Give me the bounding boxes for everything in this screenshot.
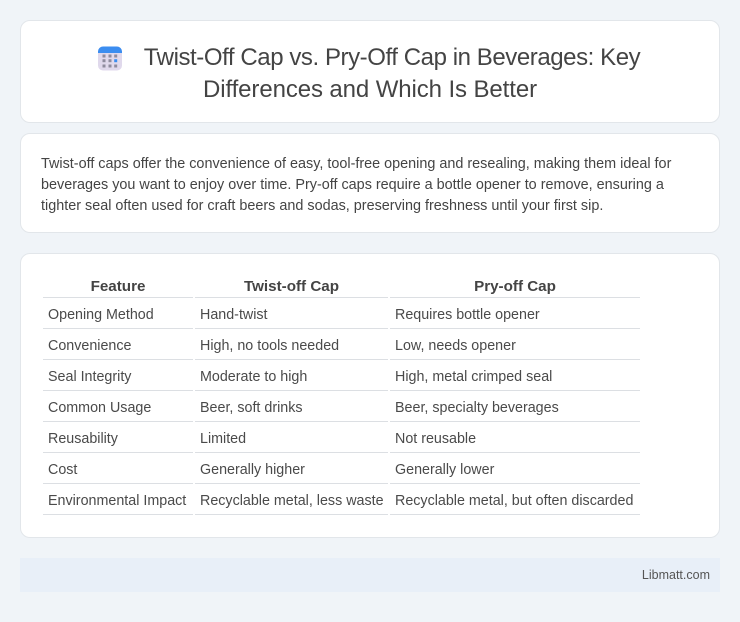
comparison table xyxy=(43,278,640,515)
row: Environmental Impact: Recyclable metal, less waste xyxy=(200,493,384,509)
row: Convenience: High, no tools needed xyxy=(200,338,339,354)
header: Feature: Feature xyxy=(91,278,145,295)
row: Seal Integrity xyxy=(48,369,552,385)
panel: footer bar xyxy=(20,558,720,592)
title xyxy=(144,44,640,103)
header: Twist-off Cap: Twist-off Cap xyxy=(244,278,339,295)
icon: calendar xyxy=(98,46,122,70)
row: Environmental Impact: Environmental Impact xyxy=(48,493,186,509)
row: Convenience: Low, needs opener xyxy=(395,338,516,354)
row: Cost xyxy=(48,462,494,478)
footer text: Libmatt.com xyxy=(642,568,710,582)
text block: introduction: tighter seal often used for craft beers and sodas, preserving freshness until your first sip. xyxy=(41,198,603,214)
panel: title card xyxy=(20,20,720,123)
row: Reusability: Not reusable xyxy=(395,431,476,447)
text block: introduction: beverages you want to enjoy over time. Pry-off caps require a bottle opener to remove, ensuring a xyxy=(41,177,664,193)
row: Cost: Generally higher xyxy=(200,462,305,478)
row: Convenience xyxy=(48,338,516,354)
row: Opening Method xyxy=(48,307,540,323)
row: Seal Integrity: High, metal crimped seal xyxy=(395,369,552,385)
row: Reusability: Limited xyxy=(200,431,246,447)
row: Seal Integrity: Seal Integrity xyxy=(48,369,131,385)
row: Seal Integrity: Moderate to high xyxy=(200,369,307,385)
title: Differences and Which Is Better xyxy=(203,76,537,103)
text block: introduction xyxy=(41,156,672,214)
header: Pry-off Cap: Pry-off Cap xyxy=(474,278,556,295)
row: Convenience: Convenience xyxy=(48,338,131,354)
title: Twist-Off Cap vs. Pry-Off Cap in Beverages: Key xyxy=(144,44,640,71)
row: Reusability: Reusability xyxy=(48,431,118,447)
row: Environmental Impact: Recyclable metal, but often discarded xyxy=(395,493,633,509)
text block: introduction: Twist-off caps offer the convenience of easy, tool-free opening and resealing, making them ideal for xyxy=(41,156,671,172)
row: Common Usage: Common Usage xyxy=(48,400,151,416)
panel: comparison table card xyxy=(20,253,720,538)
row: Common Usage xyxy=(48,400,559,416)
row: Cost: Generally lower xyxy=(395,462,494,478)
row: Reusability xyxy=(48,431,476,447)
row: Common Usage: Beer, specialty beverages xyxy=(395,400,559,416)
panel: introduction card xyxy=(20,133,720,233)
row: Opening Method: Hand-twist xyxy=(200,307,268,323)
row: Environmental Impact xyxy=(48,493,633,509)
row: Common Usage: Beer, soft drinks xyxy=(200,400,303,416)
row: Opening Method: Requires bottle opener xyxy=(395,307,540,323)
row: Cost: Cost xyxy=(48,462,77,478)
row: Opening Method: Opening Method xyxy=(48,307,154,323)
